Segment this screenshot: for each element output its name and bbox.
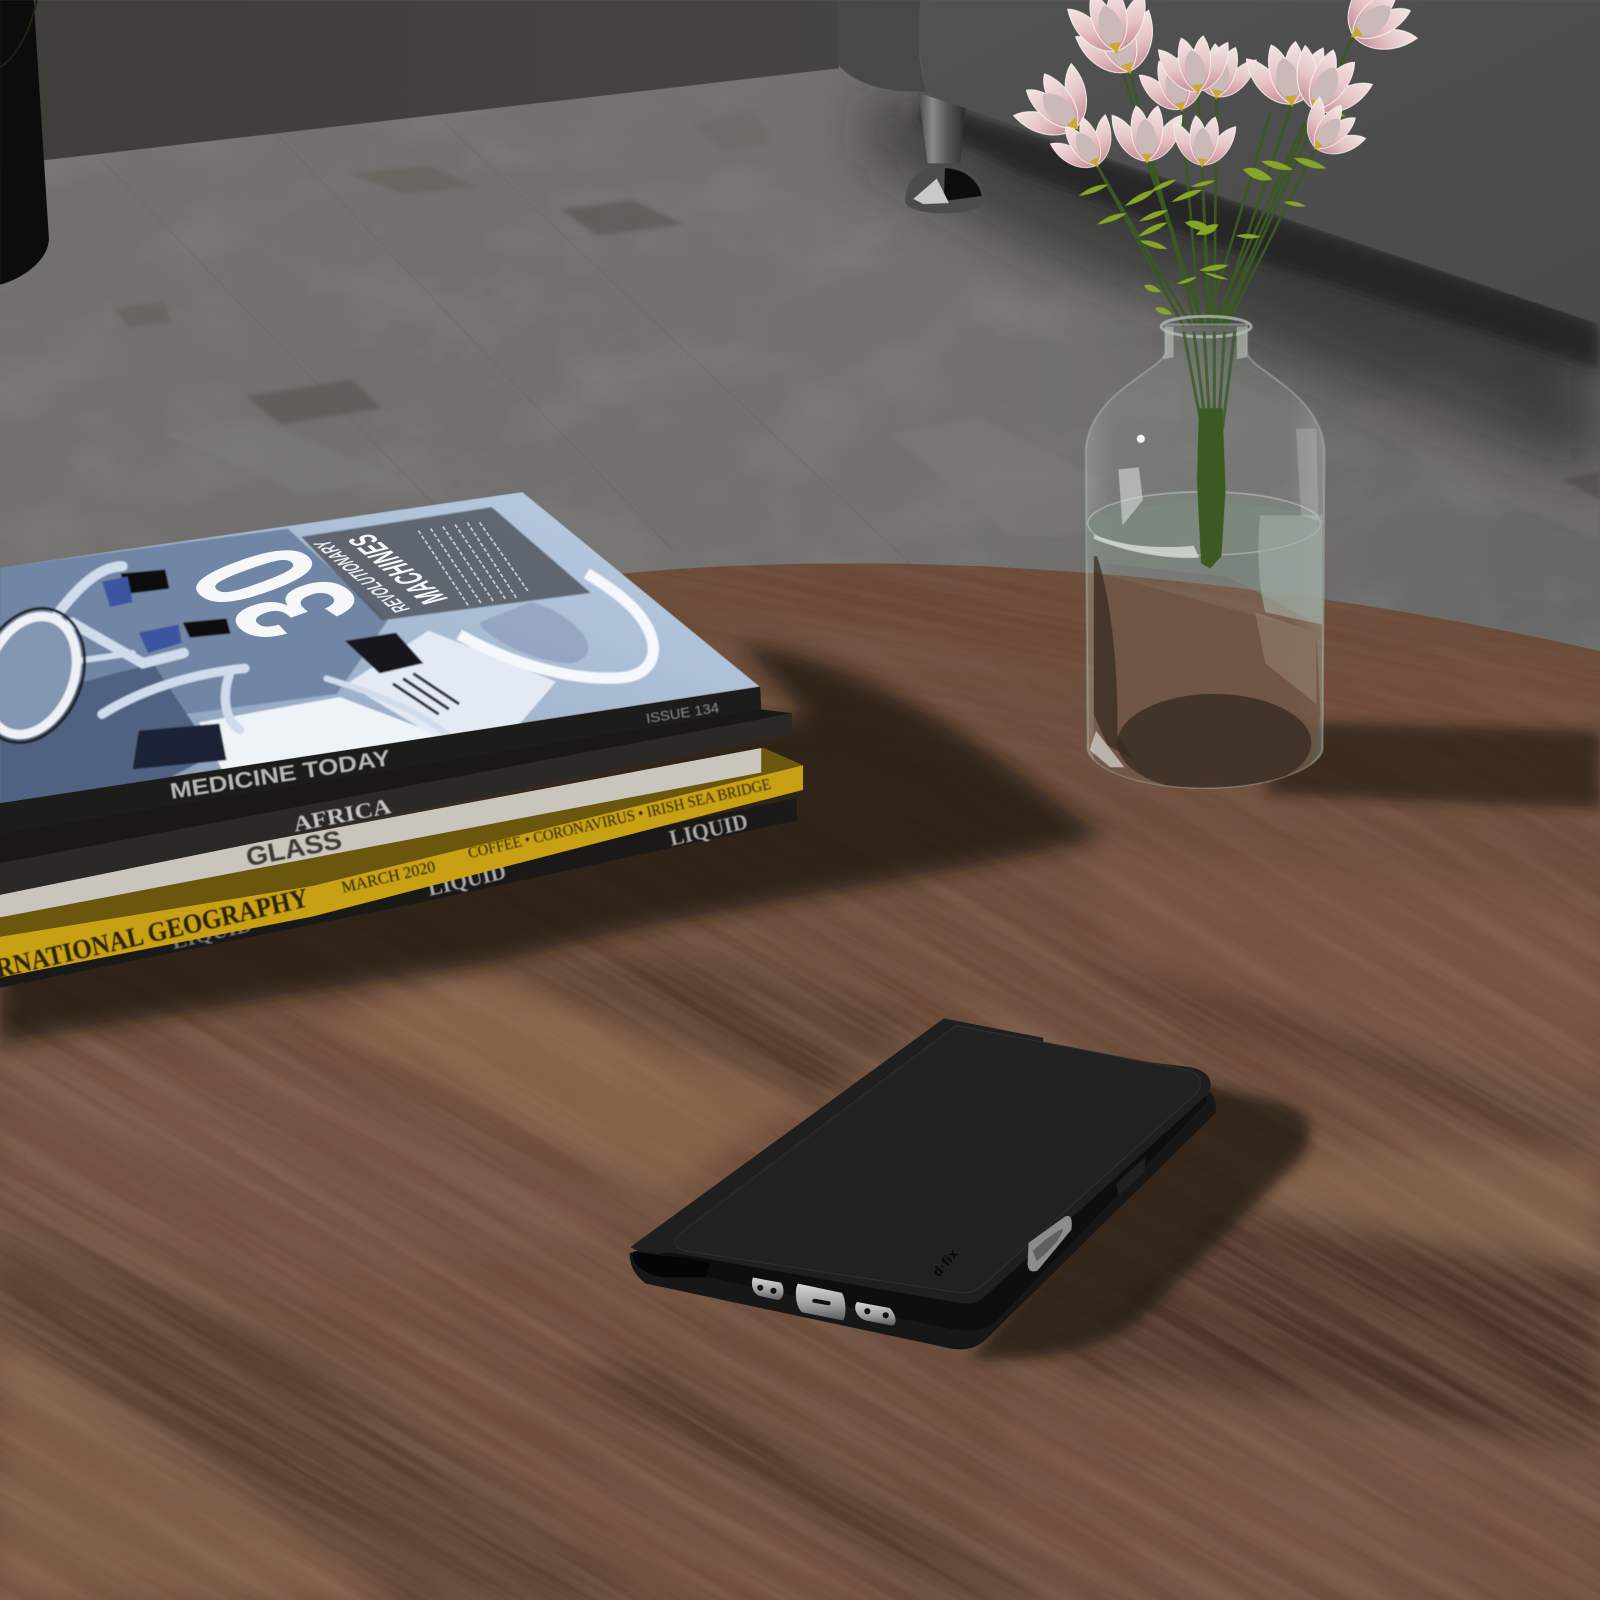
cover photo: dark interior — [0, 529, 388, 803]
cream magazine spine: GLASS — [0, 748, 761, 917]
bottom magazine spine: LIQUID: LIQUID — [667, 809, 750, 851]
cover body copy — [418, 522, 529, 607]
headline: 30: 30 — [150, 528, 400, 657]
top magazine spine: MEDICINE TODAY — [0, 687, 761, 834]
top magazine spine: MEDICINE TODAY: MEDICINE TODAY — [168, 745, 392, 804]
headline: MACHINES: MACHINES — [339, 531, 458, 607]
bottom magazine spine: LIQUID: LIQUID — [170, 914, 254, 954]
phone in folio case — [630, 1018, 1216, 1349]
vase rim — [1161, 316, 1251, 337]
front cover inset panel — [675, 1026, 1200, 1293]
sofa shadow on floor — [867, 87, 1600, 480]
vase base — [1117, 694, 1311, 792]
glass vase — [1086, 316, 1324, 792]
water volume — [1086, 503, 1324, 624]
cover photo: monitors — [133, 723, 227, 769]
phone body side — [653, 1084, 1207, 1331]
sofa arm — [837, 0, 927, 92]
case rear cover — [630, 1092, 1216, 1349]
bottom magazine spine: LIQUID — [0, 798, 797, 988]
black magazine spine: AFRICA — [0, 709, 792, 895]
top magazine spine: MEDICINE TODAY: ISSUE 134 — [645, 700, 720, 727]
sofa — [918, 0, 1600, 324]
wooden table — [0, 551, 1600, 1600]
vase shadow — [1265, 721, 1600, 809]
cover photo: robot arms — [41, 566, 459, 745]
black magazine spine: AFRICA: AFRICA — [291, 793, 394, 837]
front cover — [631, 1018, 1211, 1304]
headline: REVOLUTIONARY: REVOLUTIONARY — [308, 538, 416, 614]
cover photo: white floor — [198, 696, 436, 770]
water surface — [1088, 492, 1320, 555]
cover photo: white scanner curve — [459, 573, 653, 678]
cover text box — [301, 507, 591, 620]
vase left reflection — [1094, 556, 1135, 760]
speaker port right — [855, 1302, 896, 1326]
submerged stems — [1184, 332, 1235, 568]
dark side button — [1116, 1157, 1145, 1196]
silver side button — [1028, 1216, 1072, 1271]
cover photo: oval ring — [0, 603, 93, 748]
yellow magazine spine: MARCH 2020 — [339, 857, 437, 897]
magazine stack — [0, 492, 803, 988]
speaker port left — [752, 1278, 784, 1300]
top magazine cover — [0, 492, 760, 803]
vase highlights — [1118, 467, 1143, 526]
hinge opening — [633, 1251, 710, 1278]
phone shadow — [969, 1082, 1310, 1360]
black vase at top left — [0, 0, 49, 285]
cream magazine spine: GLASS: GLASS — [244, 826, 344, 872]
charging port — [796, 1284, 845, 1320]
flower blossoms — [1007, 0, 1425, 182]
floor — [0, 0, 1600, 857]
flower leaves — [1079, 107, 1346, 315]
sofa leg — [905, 93, 985, 213]
back wall — [0, 0, 839, 168]
shadow cast by books — [0, 643, 1102, 1043]
bottom magazine spine: LIQUID: LIQUID — [425, 859, 508, 901]
refraction on table — [1094, 571, 1320, 786]
flower stems — [1077, 36, 1353, 327]
vase body glass — [1086, 324, 1324, 788]
yellow magazine spine: COFFEE • CORONAVIRUS • IRISH SEA BRIDGE — [466, 776, 773, 862]
yellow magazine spine — [0, 748, 803, 987]
case logo: d·fix — [930, 1246, 961, 1279]
